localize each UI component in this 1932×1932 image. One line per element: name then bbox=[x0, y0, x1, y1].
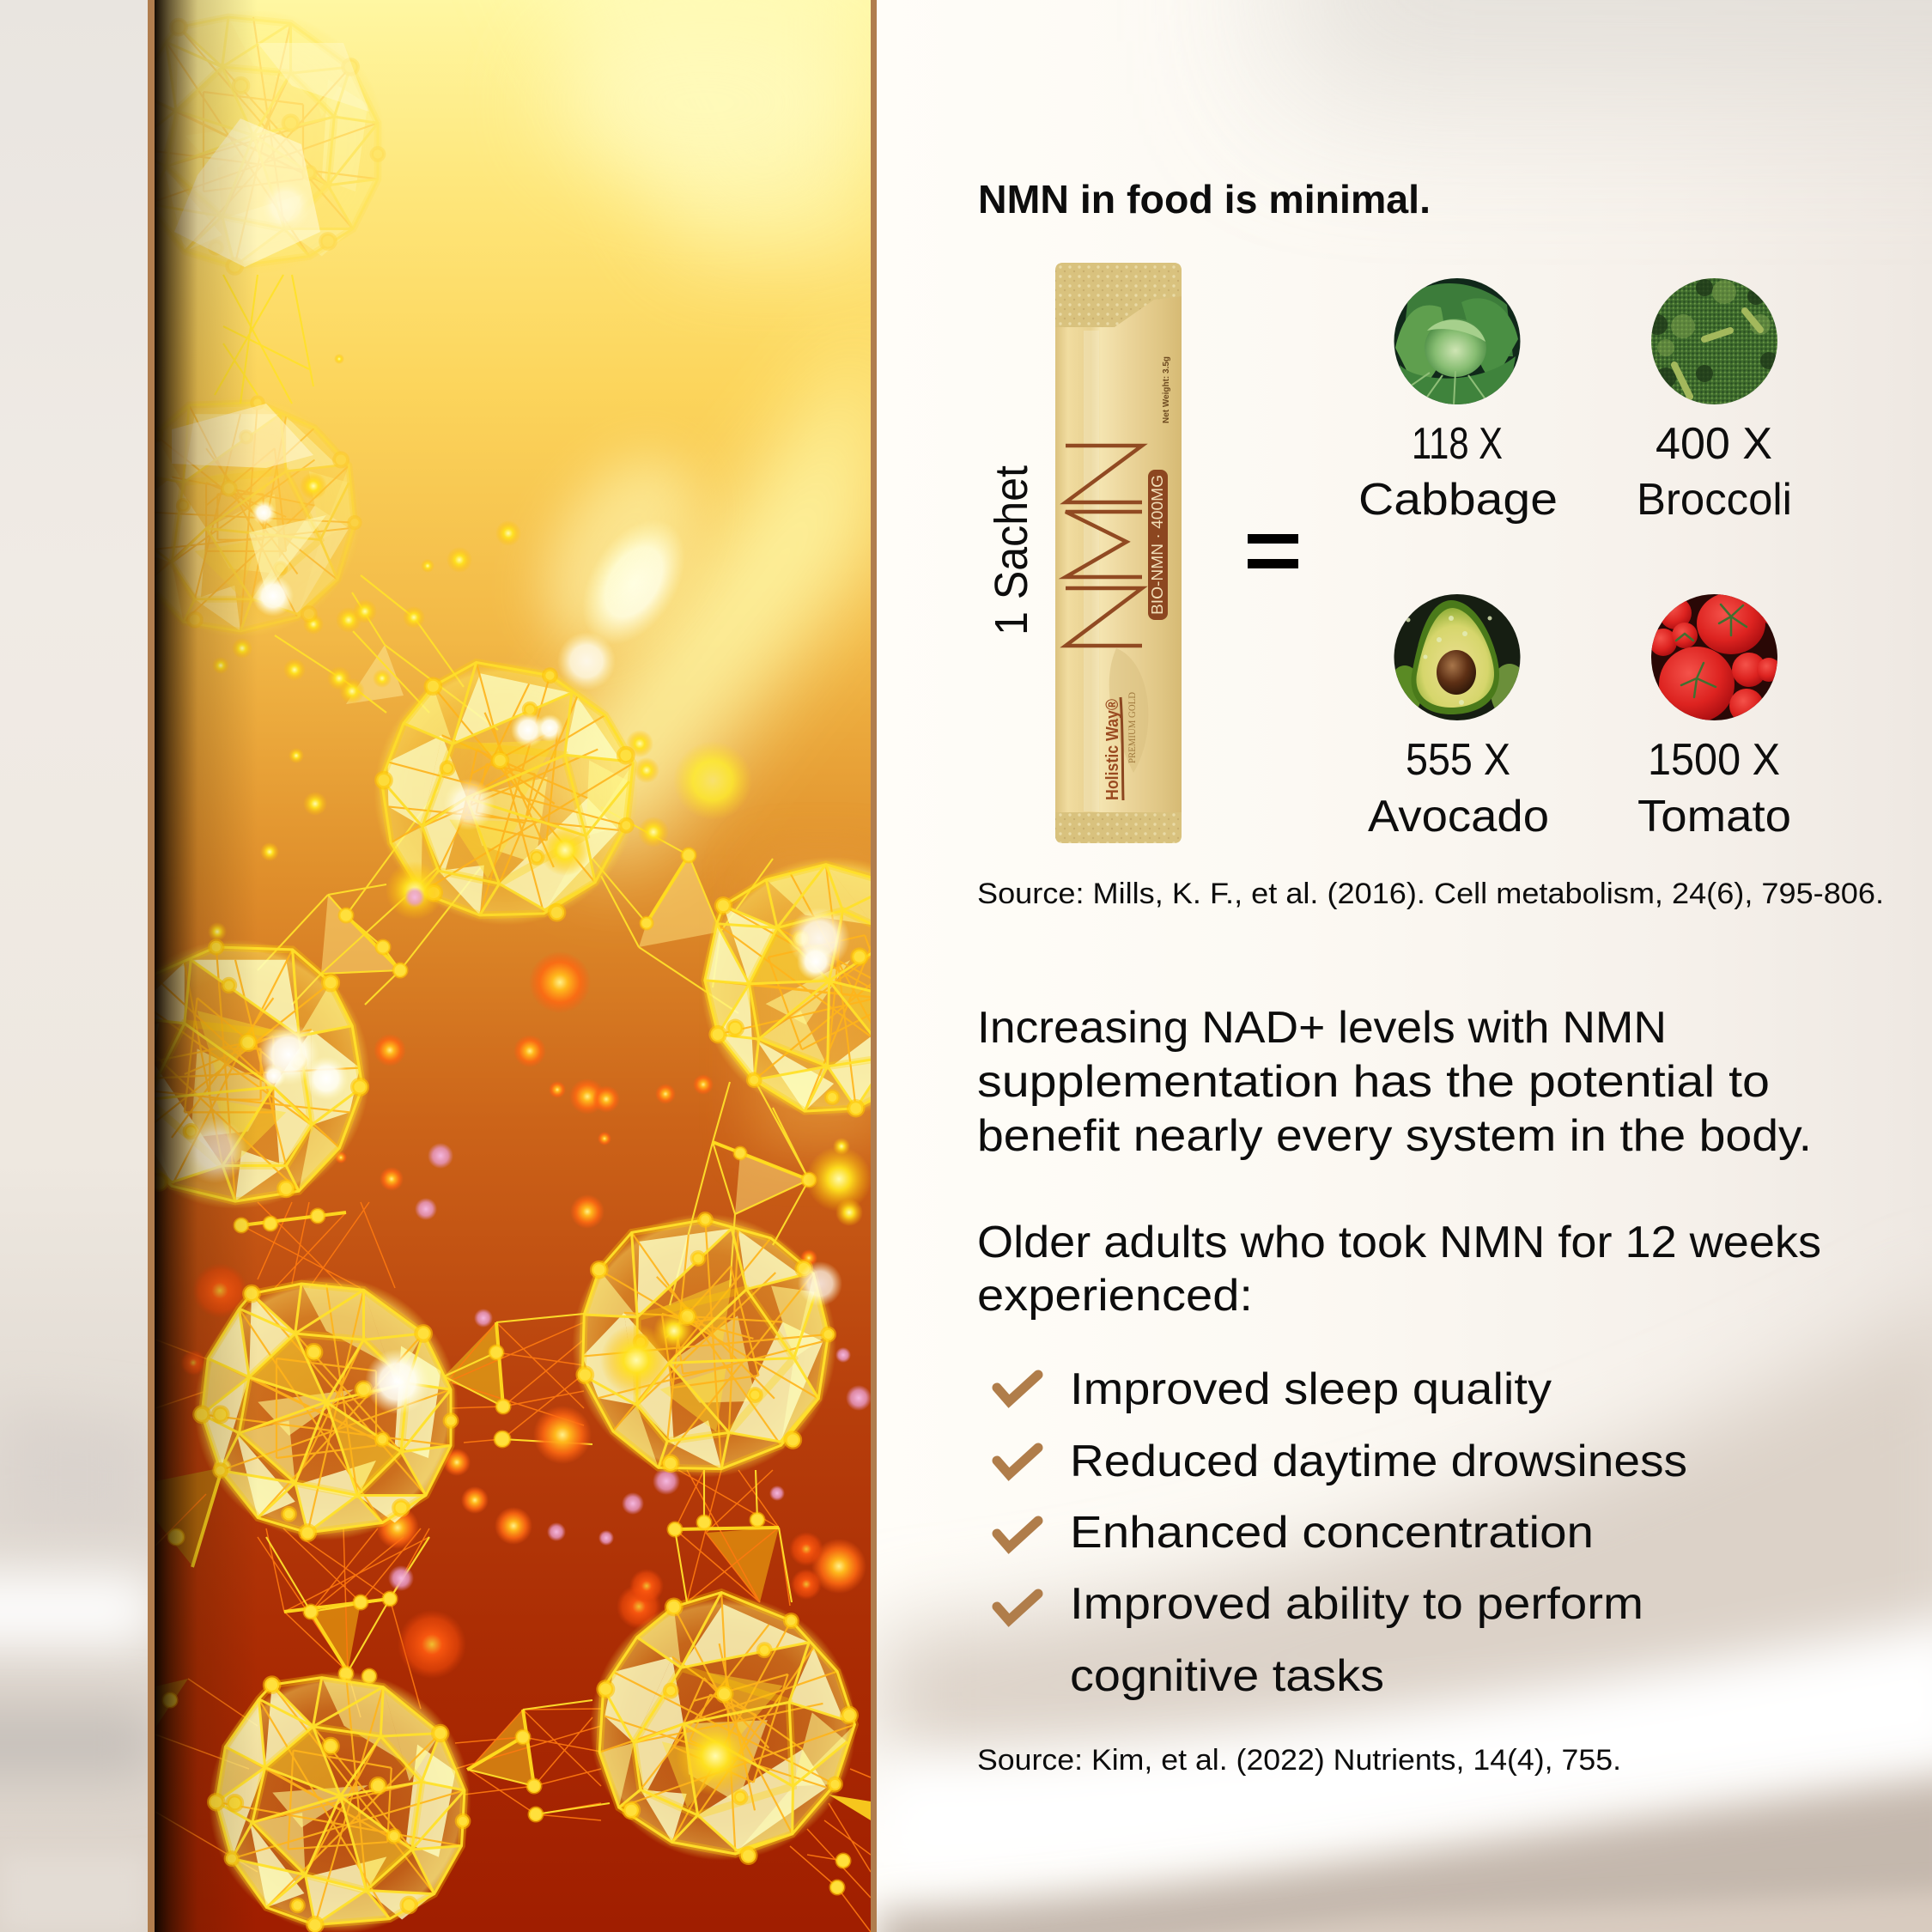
molecule sphere 1 bbox=[165, 14, 386, 276]
icon: tomato bbox=[1649, 592, 1786, 726]
brand underline bbox=[1121, 697, 1123, 800]
molecule sphere 5 bbox=[100, 939, 370, 1209]
heading: NMN in food is minimal. bbox=[978, 177, 1431, 222]
paragraph: NAD+ benefits: Increasing NAD+ levels with NMN bbox=[977, 1003, 1667, 1053]
top seal bbox=[1055, 263, 1182, 327]
label: broccoli bbox=[1637, 419, 1792, 525]
panel frame bbox=[148, 0, 877, 1932]
molecule sphere 2 bbox=[161, 395, 362, 635]
molecule sphere 6 bbox=[194, 1276, 459, 1540]
sachet label: 1 Sachet bbox=[986, 465, 1037, 635]
icon: check 2 bbox=[997, 1448, 1038, 1474]
icon: check 3 bbox=[997, 1521, 1038, 1547]
label: cabbage: 118 X bbox=[1412, 419, 1503, 469]
molecule sphere 3 bbox=[349, 637, 662, 950]
label: tomato: Tomato bbox=[1637, 792, 1791, 841]
dose pill: BIO-NMN · 400MG bbox=[1149, 475, 1166, 615]
label: avocado: Avocado bbox=[1368, 792, 1549, 841]
flare highlights bbox=[519, 436, 713, 689]
left edge shadow bbox=[155, 0, 266, 1932]
benefit: drowsiness: Reduced daytime drowsiness bbox=[1070, 1437, 1687, 1486]
benefit: sleep: Improved sleep quality bbox=[1070, 1364, 1552, 1414]
molecular connections bbox=[155, 275, 871, 1932]
net weight: Net Weight: 3.5g bbox=[1161, 356, 1171, 423]
paragraph: older adults bbox=[977, 1218, 1821, 1321]
molecule sphere 8 bbox=[203, 1665, 477, 1932]
label: broccoli: 400 X bbox=[1656, 419, 1772, 469]
molecule sphere 9 bbox=[548, 1552, 898, 1903]
white swoosh bbox=[877, 1614, 1932, 1889]
sachet product bbox=[1055, 263, 1182, 843]
molecule sphere 7 bbox=[555, 1196, 854, 1495]
benefit: cognitive tasks bbox=[1070, 1579, 1643, 1701]
icon: cabbage bbox=[1391, 275, 1524, 408]
equals sign bbox=[1248, 534, 1298, 568]
paragraph: older adults: experienced: bbox=[977, 1271, 1253, 1321]
paragraph: older adults: Older adults who took NMN for 12 weeks bbox=[977, 1218, 1821, 1267]
label: tomato: 1500 X bbox=[1648, 735, 1780, 785]
label: avocado: 555 X bbox=[1406, 735, 1510, 785]
benefit list bbox=[997, 1364, 1687, 1701]
paragraph: NAD+ benefits: supplementation has the potential to bbox=[977, 1057, 1770, 1107]
icon: check 1 bbox=[997, 1375, 1038, 1401]
label: cabbage: Cabbage bbox=[1358, 475, 1558, 525]
source: Mills: Source: Mills, K. F., et al. (2016). Cell metabolism, 24(6), 795-806. bbox=[977, 878, 1884, 910]
icon: broccoli bbox=[1647, 275, 1782, 408]
leaf decoration bbox=[1109, 648, 1148, 773]
benefit: cognitive tasks: cognitive tasks bbox=[1070, 1651, 1384, 1701]
label: avocado bbox=[1368, 735, 1549, 841]
molecule sphere 4 bbox=[665, 820, 998, 1153]
NMN logo bbox=[1066, 446, 1142, 646]
label: cabbage bbox=[1358, 419, 1558, 525]
paragraph: NAD+ benefits bbox=[977, 1003, 1812, 1161]
panel: golden molecule image bbox=[148, 0, 877, 1932]
sphere highlights bbox=[182, 180, 850, 1795]
benefit: concentration: Enhanced concentration bbox=[1070, 1508, 1594, 1558]
molecule artwork bbox=[155, 0, 871, 1932]
bokeh glows behind molecules bbox=[180, 354, 872, 1679]
label: broccoli: Broccoli bbox=[1637, 475, 1792, 525]
source: Kim: Source: Kim, et al. (2022) Nutrients, 14(4), 755. bbox=[977, 1744, 1621, 1777]
benefit: cognitive tasks: Improved ability to perform bbox=[1070, 1579, 1643, 1629]
paragraph: NAD+ benefits: benefit nearly every system in the body. bbox=[977, 1111, 1812, 1161]
bottom seal bbox=[1055, 812, 1182, 843]
taupe floor bbox=[877, 1777, 1932, 1932]
label: tomato bbox=[1637, 735, 1791, 841]
icon: check 4 bbox=[997, 1594, 1038, 1620]
premium gold: PREMIUM GOLD bbox=[1127, 692, 1138, 763]
brand: Holistic Way® bbox=[1103, 699, 1122, 800]
icon: avocado bbox=[1388, 592, 1528, 726]
